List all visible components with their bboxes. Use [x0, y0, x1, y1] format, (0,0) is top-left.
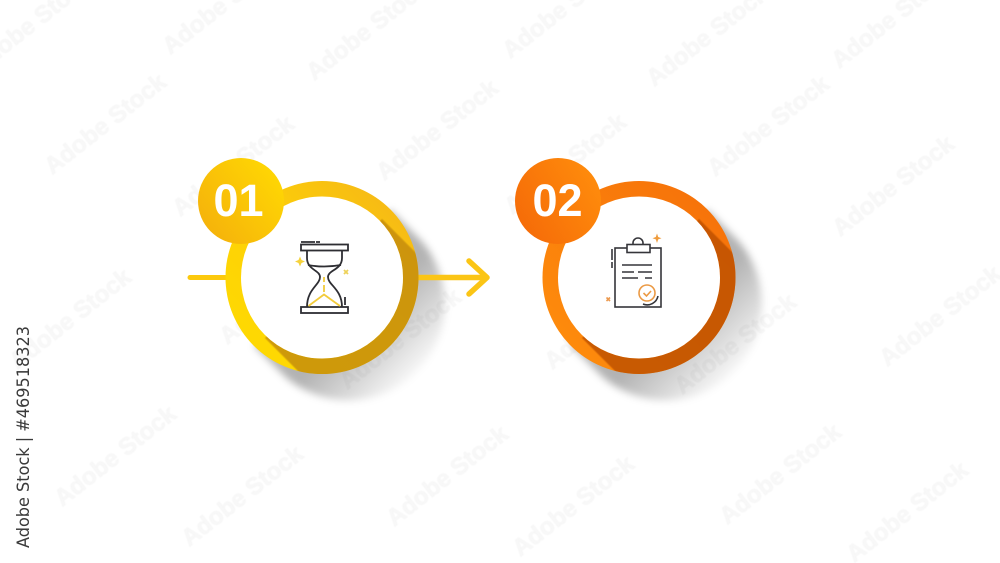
step 1 number badge	[198, 158, 284, 244]
background watermarks: Adobe Stock	[381, 420, 514, 532]
step 2 ring	[542, 181, 736, 374]
background watermarks: Adobe Stock	[539, 263, 672, 375]
background watermarks: Adobe Stock	[39, 68, 172, 180]
background watermarks: Adobe Stock	[371, 74, 504, 186]
step 2 white disc	[558, 196, 720, 358]
step 2 number badge: 02	[532, 175, 583, 226]
step 1 long shadow	[254, 210, 445, 400]
arrow from step 1 to step 2	[415, 261, 487, 294]
background watermarks: Adobe Stock	[176, 440, 309, 552]
step 1 ring shadow	[264, 219, 418, 374]
step 2 ring shadow	[582, 219, 736, 374]
background watermarks: Adobe Stock	[167, 110, 300, 222]
step 1 circle	[226, 181, 418, 374]
background watermarks: Adobe Stock	[214, 238, 347, 350]
step 1 number badge: 01	[213, 175, 264, 226]
background watermarks: Adobe Stock	[507, 450, 640, 562]
background watermarks: Adobe Stock	[4, 263, 137, 375]
vertical stock id text: Adobe Stock | #469518323	[14, 326, 34, 548]
step 2 circle	[542, 181, 736, 374]
background watermarks: Adobe Stock	[334, 283, 467, 395]
step 1 white disc	[241, 196, 403, 358]
step 1 incoming line	[190, 275, 230, 280]
background watermarks: Adobe Stock	[499, 108, 632, 220]
background watermarks: Adobe Stock	[702, 70, 835, 182]
background watermarks: Adobe Stock	[714, 418, 847, 530]
icon: hourglass	[295, 242, 348, 313]
background watermarks: Adobe Stock	[669, 288, 802, 400]
step 2 number badge	[515, 158, 601, 244]
step 2 long shadow	[571, 210, 762, 400]
icon: clipboard with check	[606, 234, 662, 307]
background watermarks: Adobe Stock	[49, 400, 182, 512]
background watermarks: Adobe Stock	[827, 130, 960, 242]
step 1 ring	[226, 181, 418, 374]
